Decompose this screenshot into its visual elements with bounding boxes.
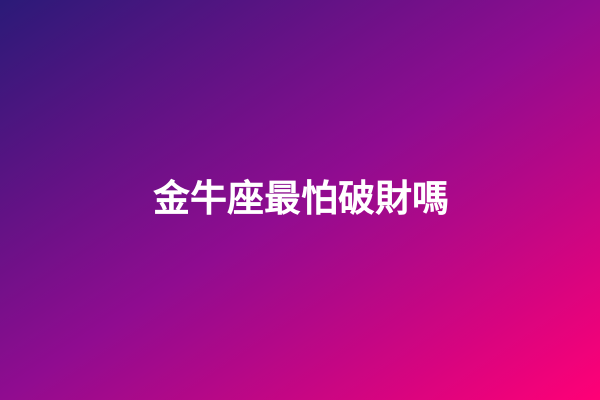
title: 金牛座最怕破財嗎 <box>153 178 449 219</box>
